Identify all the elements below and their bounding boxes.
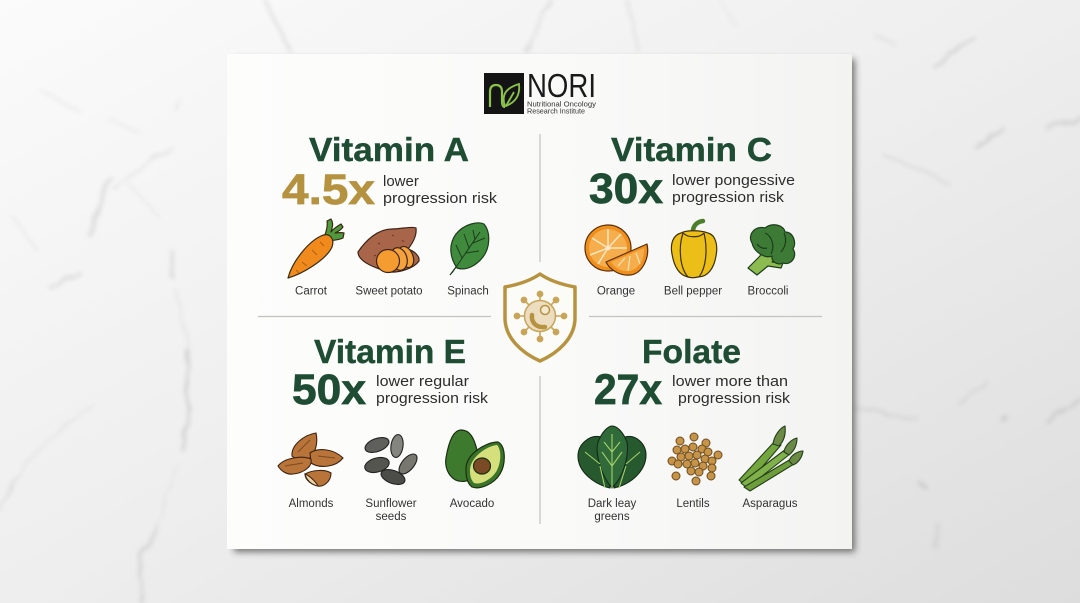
labels: Orange	[597, 286, 635, 298]
panel: Vitamin C	[585, 131, 795, 298]
description: lower more than	[672, 373, 788, 390]
labels: Sweet potato	[355, 286, 423, 298]
icon: orange	[585, 225, 648, 275]
labels	[588, 498, 798, 523]
labels: Avocado	[450, 498, 494, 510]
icon: spinach	[450, 223, 489, 275]
labels: Lentils	[676, 498, 710, 510]
infographic card	[227, 54, 852, 549]
labels: Asparagus	[743, 498, 798, 510]
labels: seeds	[376, 511, 407, 523]
description	[383, 173, 498, 207]
description: progression risk	[678, 390, 791, 407]
labels: Spinach	[447, 286, 489, 298]
labels	[295, 286, 489, 298]
description: progression risk	[383, 190, 498, 207]
NORI logo: NORI	[527, 67, 596, 104]
heading: Vitamin C	[611, 131, 772, 168]
labels: Dark leay	[588, 498, 637, 510]
icon: bell pepper	[671, 221, 717, 278]
labels	[597, 286, 788, 298]
panel: Vitamin A	[282, 131, 498, 298]
icon: avocado	[446, 430, 504, 488]
description: progression risk	[672, 189, 785, 206]
icon: almonds	[278, 433, 343, 486]
labels: greens	[594, 511, 630, 523]
icon: lentils	[668, 433, 722, 485]
description	[672, 373, 791, 407]
icon: broccoli	[748, 225, 795, 275]
NORI logo: Nutritional Oncology	[527, 100, 596, 108]
labels: Bell pepper	[664, 286, 722, 298]
icon: dark leafy greens	[578, 426, 646, 488]
NORI logo	[484, 67, 596, 116]
icon: asparagus	[739, 426, 803, 491]
icon: shield with virus	[505, 274, 575, 361]
description: lower regular	[376, 373, 469, 390]
labels: Sunflower	[365, 498, 417, 510]
description: lower pongessive	[672, 172, 795, 189]
stat: 4.5x	[282, 166, 375, 214]
stat: 50x	[292, 366, 366, 414]
quadrant dividers	[258, 134, 822, 524]
labels: Broccoli	[748, 286, 788, 298]
description	[672, 172, 795, 206]
panel: Folate	[578, 333, 803, 523]
icon: sunflower seeds	[363, 434, 420, 487]
labels: Carrot	[295, 286, 328, 298]
icon: carrot	[288, 219, 344, 278]
heading: Vitamin A	[309, 131, 469, 168]
panel shadow	[234, 59, 855, 552]
heading: Folate	[642, 333, 741, 370]
icon: sweet potato	[358, 227, 419, 272]
stat: 27x	[594, 366, 662, 414]
stat: 30x	[589, 165, 663, 213]
labels: Almonds	[289, 498, 334, 510]
description	[376, 373, 489, 407]
description: lower	[383, 173, 419, 190]
heading: Vitamin E	[314, 333, 466, 370]
description: progression risk	[376, 390, 489, 407]
NORI logo: Research Institute	[527, 106, 585, 116]
labels	[289, 498, 494, 523]
panel: Vitamin E	[278, 333, 504, 523]
